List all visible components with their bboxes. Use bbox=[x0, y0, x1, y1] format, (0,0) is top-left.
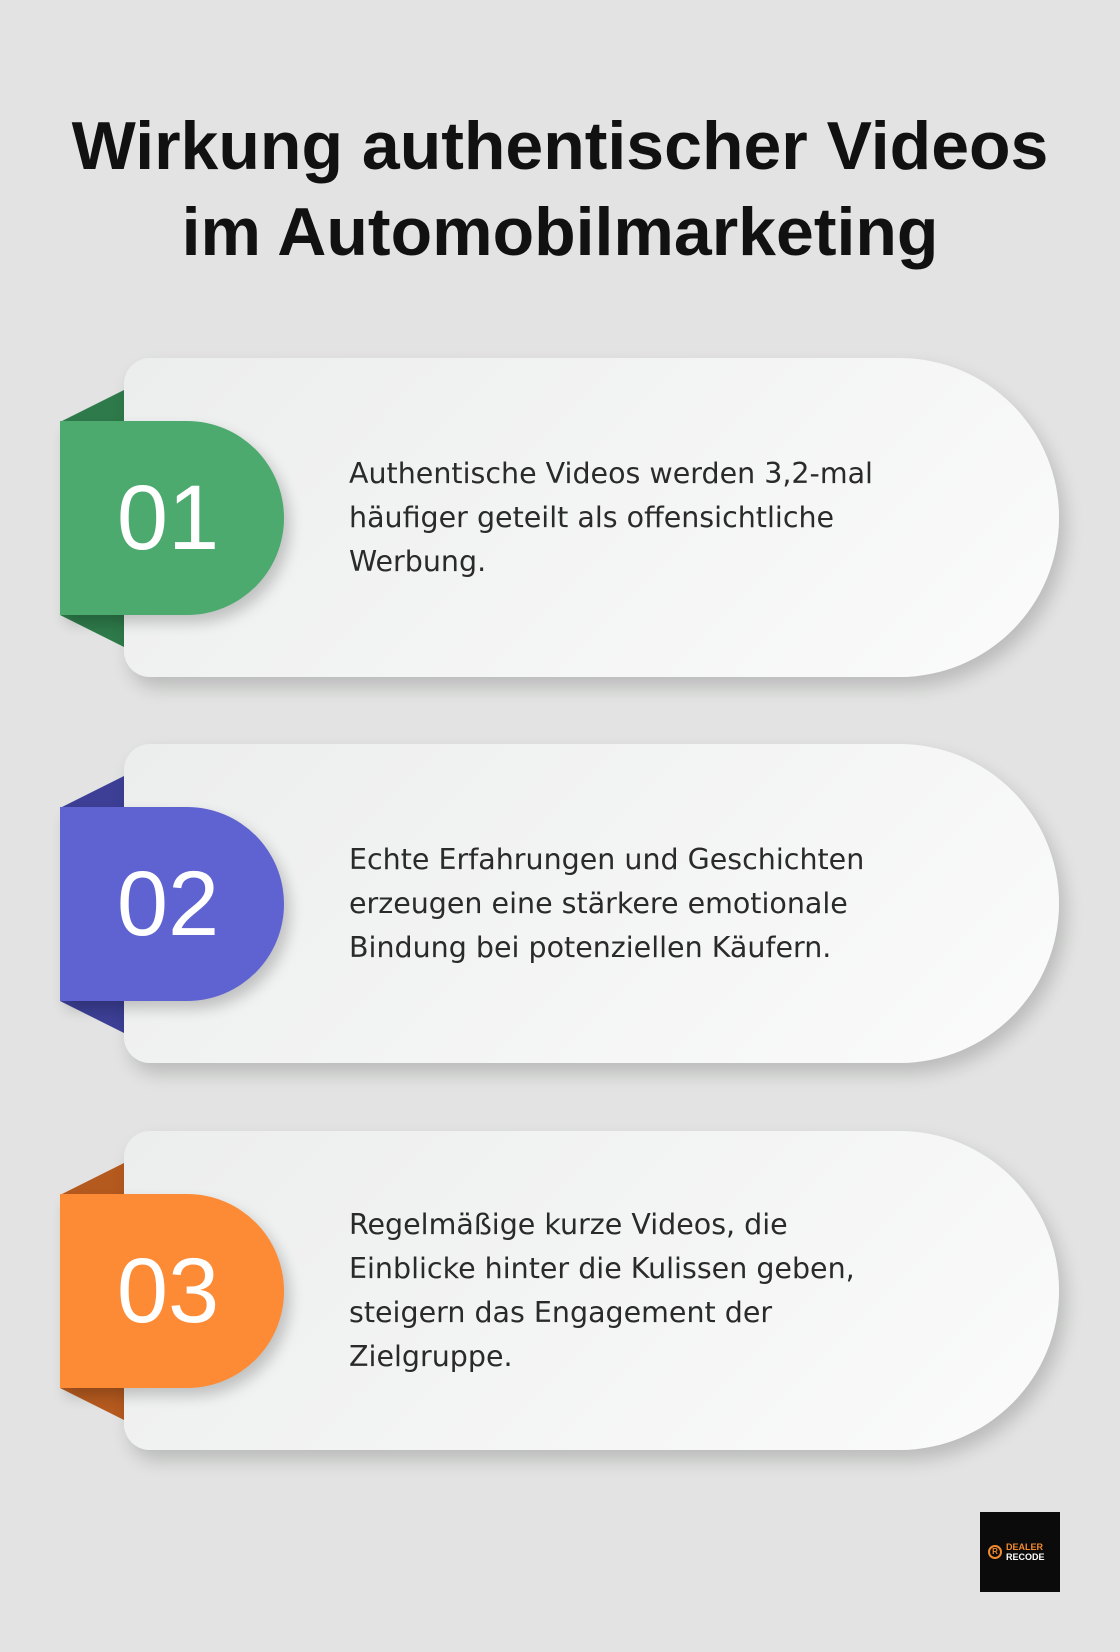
fold: top 02 bbox=[62, 776, 124, 807]
fold: bottom 03 bbox=[60, 1388, 124, 1420]
panel: item 01 bbox=[60, 358, 1072, 694]
text 01: Werbung. bbox=[349, 545, 486, 578]
text 01: Authentische Videos werden 3,2-mal bbox=[349, 457, 873, 490]
panel: item 03 bbox=[60, 1131, 1072, 1467]
logo icon: R bbox=[992, 1547, 998, 1556]
fold: top 03 bbox=[62, 1163, 124, 1194]
badge 02: 02 bbox=[117, 853, 219, 955]
panel: item 02 bbox=[60, 744, 1072, 1080]
badge 02 bbox=[60, 807, 284, 1001]
text 03: Regelmäßige kurze Videos, die bbox=[349, 1208, 788, 1241]
fold: bottom 02 bbox=[60, 1001, 124, 1033]
card 02 bbox=[124, 744, 1059, 1063]
logo icon bbox=[988, 1545, 1002, 1559]
text 03: Einblicke hinter die Kulissen geben, bbox=[349, 1252, 855, 1285]
fold: top 01 bbox=[62, 390, 124, 421]
text 02: Bindung bei potenziellen Käufern. bbox=[349, 931, 831, 964]
logo text: RECODE bbox=[1006, 1552, 1045, 1562]
text 02: erzeugen eine stärkere emotionale bbox=[349, 887, 848, 920]
text 01: häufiger geteilt als offensichtliche bbox=[349, 501, 834, 534]
fold: bottom 01 bbox=[60, 615, 124, 647]
text 01 bbox=[349, 457, 873, 578]
title bbox=[72, 108, 1048, 270]
text 02: Echte Erfahrungen und Geschichten bbox=[349, 843, 864, 876]
badge 01: 01 bbox=[117, 467, 219, 569]
text 03 bbox=[349, 1208, 855, 1373]
text 03: Zielgruppe. bbox=[349, 1340, 513, 1373]
logo text bbox=[1006, 1542, 1045, 1562]
title: im Automobilmarketing bbox=[182, 194, 938, 270]
card 01 bbox=[124, 358, 1059, 677]
text 02 bbox=[349, 843, 864, 964]
logo bbox=[980, 1512, 1060, 1592]
logo text: DEALER bbox=[1006, 1542, 1043, 1552]
text 03: steigern das Engagement der bbox=[349, 1296, 772, 1329]
badge 03: 03 bbox=[117, 1240, 219, 1342]
card 03 bbox=[124, 1131, 1059, 1450]
title: Wirkung authentischer Videos bbox=[72, 108, 1048, 184]
badge 01 bbox=[60, 421, 284, 615]
badge 03 bbox=[60, 1194, 284, 1388]
